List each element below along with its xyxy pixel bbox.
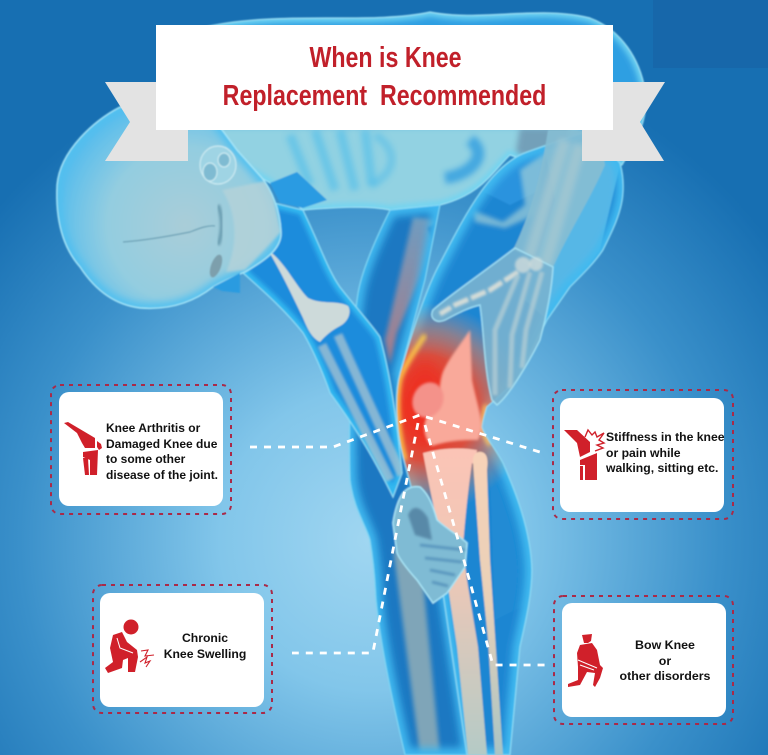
card <box>562 603 726 717</box>
card text: to some other <box>106 452 185 466</box>
card text <box>606 430 725 475</box>
femur <box>424 330 481 446</box>
patella <box>407 377 449 423</box>
title line 1: When is Knee <box>309 42 462 74</box>
torso and back <box>200 12 646 220</box>
dotted border <box>552 389 734 520</box>
head and skull <box>57 100 281 308</box>
dotted border <box>553 595 734 725</box>
icon: kneeling person <box>105 620 154 673</box>
icon: kneeling man <box>568 634 603 687</box>
vertebra detail <box>200 146 236 184</box>
panel: swelling <box>92 584 273 714</box>
card text: other disorders <box>620 669 710 683</box>
hand on calf <box>393 487 467 603</box>
panel: stiffness <box>552 389 734 520</box>
dotted border <box>50 384 232 515</box>
card text: Knee Swelling <box>164 647 246 661</box>
title line 2: Replacement Recommended <box>223 80 546 112</box>
card text: or pain while <box>606 446 680 460</box>
card text <box>106 421 218 482</box>
card text: disease of the joint. <box>106 468 218 482</box>
front arm <box>243 200 402 497</box>
front leg <box>380 130 623 755</box>
card text: Bow Knee <box>635 638 695 652</box>
card text: walking, sitting etc. <box>606 461 718 475</box>
hand on thigh <box>432 248 553 405</box>
card text: Damaged Knee due <box>106 437 217 451</box>
card <box>59 392 223 506</box>
dotted border <box>92 584 273 714</box>
card <box>560 398 724 512</box>
anatomical figure <box>57 12 646 755</box>
dashed connector lines <box>250 415 548 665</box>
card <box>100 593 264 707</box>
title banner <box>156 25 613 130</box>
card text: Chronic <box>182 631 228 645</box>
icon: painful knee <box>564 428 606 480</box>
card text <box>164 631 246 661</box>
shoulder blade <box>270 172 327 208</box>
card text: Stiffness in the knee <box>606 430 725 444</box>
card text: or <box>659 654 671 668</box>
back leg <box>349 205 470 755</box>
title ribbon right tail <box>582 82 665 161</box>
jaw shadow <box>213 273 240 293</box>
title ribbon left tail <box>105 82 188 161</box>
fibula <box>473 452 503 755</box>
panel: knee arthritis <box>50 384 232 515</box>
forearm bones <box>528 140 580 265</box>
card text <box>620 638 710 683</box>
panel: bow knee <box>553 595 734 725</box>
card text: Knee Arthritis or <box>106 421 200 435</box>
rear forearm <box>513 130 605 267</box>
tibia <box>423 448 487 755</box>
icon: knee joint <box>64 422 102 475</box>
